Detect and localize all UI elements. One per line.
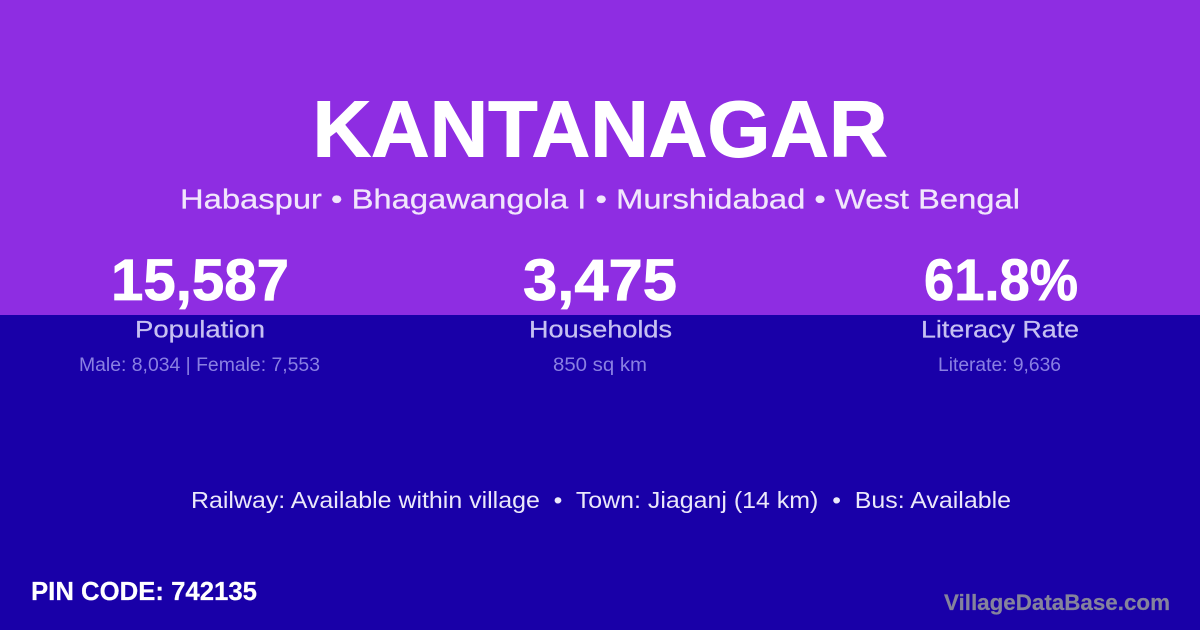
- watermark: VillageDataBase.com: [944, 590, 1170, 615]
- population breakdown: Male: 8,034 | Female: 7,553: [79, 355, 320, 376]
- households area: 850 sq km: [553, 355, 647, 376]
- households value: 3,475: [523, 248, 677, 313]
- population value: 15,587: [111, 248, 289, 313]
- panel: top purple background: [0, 0, 1200, 315]
- stat: population: [79, 248, 320, 376]
- subtitle: location: Habaspur • Bhagawangola I • Murshidabad • West Bengal: [180, 184, 1020, 214]
- literacy value: 61.8%: [924, 248, 1078, 313]
- panel: bottom blue background: [0, 315, 1200, 630]
- population label: Population: [135, 316, 265, 344]
- households label: Households: [529, 316, 672, 344]
- title: KANTANAGAR: [312, 84, 887, 174]
- stat: literacy rate: [921, 248, 1079, 376]
- literacy label: Literacy Rate: [921, 316, 1079, 344]
- stat: households: [523, 248, 677, 376]
- connectivity line: Railway: Available within village • Town: Jiaganj (14 km) • Bus: Available: [191, 487, 1011, 513]
- literate count: Literate: 9,636: [938, 355, 1061, 376]
- pin code: PIN CODE: 742135: [31, 576, 257, 606]
